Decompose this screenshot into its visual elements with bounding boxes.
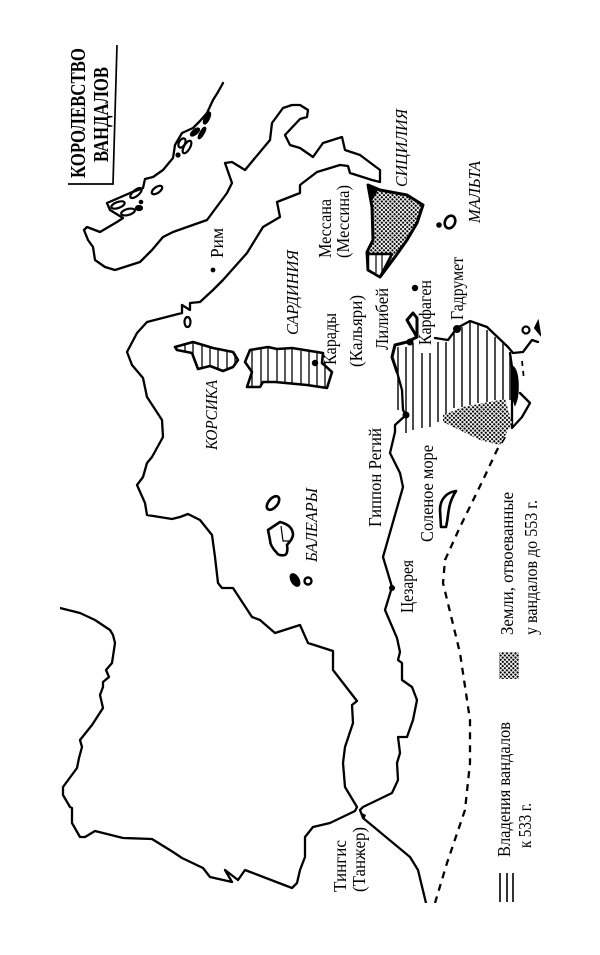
- legend: Vandal possessions: Владения вандалов: [494, 722, 514, 857]
- legend: reconquered lands: [497, 492, 541, 679]
- place labels: (Кальяри): [346, 295, 366, 367]
- islet near Rome: [184, 317, 190, 327]
- place labels: Лилибей: [372, 288, 392, 350]
- lands reconquered: Africa: [443, 399, 512, 445]
- islands: Dalmatian: [110, 112, 211, 217]
- place labels: Тингис: [330, 840, 350, 892]
- place labels: МАЛЬТА: [465, 160, 484, 224]
- place labels: СИЦИЛИЯ: [392, 108, 411, 187]
- salt sea: [440, 491, 456, 527]
- island: Sardinia: [245, 347, 332, 388]
- place labels: [202, 108, 484, 892]
- place labels: Мессана: [315, 199, 335, 258]
- map sheet: [60, 45, 541, 903]
- map: european coast: [60, 83, 380, 888]
- city dots: [211, 268, 461, 820]
- legend: reconquered lands: у вандалов до 553 г.: [521, 500, 541, 635]
- place labels: (Танжер): [349, 827, 369, 892]
- place labels: Соленое море: [417, 445, 437, 542]
- island: Corsica: [175, 342, 238, 371]
- lake in Tunisia: [512, 367, 518, 404]
- place labels: Карфаген: [415, 280, 435, 345]
- island: Sicily: [367, 185, 423, 277]
- place labels: БАЛЕАРЫ: [302, 487, 321, 563]
- title: ВАНДАЛОВ: [89, 67, 113, 162]
- map: african coast: [360, 313, 538, 903]
- islets off Tunisia: [522, 322, 540, 334]
- title: КОРОЛЕВСТВО: [66, 48, 90, 178]
- islands: Balearics: [264, 494, 312, 588]
- place labels: КОРСИКА: [202, 379, 221, 451]
- place labels: Гадрумет: [447, 257, 467, 320]
- island: Malta: [436, 214, 457, 230]
- legend: reconquered lands: Земли, отвоеванные: [497, 492, 517, 635]
- title: [66, 45, 117, 184]
- place labels: Гиппон Регий: [365, 428, 385, 527]
- hatching: Africa: [398, 322, 510, 433]
- place labels: Цезарея: [397, 560, 417, 613]
- legend: Vandal possessions: [494, 722, 535, 902]
- legend: Vandal possessions: к 533 г.: [515, 803, 535, 848]
- dashed frontier: [435, 437, 505, 903]
- place labels: САРДИНИЯ: [283, 249, 302, 335]
- place labels: Рим: [207, 228, 227, 258]
- place labels: Карады: [320, 313, 340, 365]
- place labels: (Мессина): [333, 185, 353, 258]
